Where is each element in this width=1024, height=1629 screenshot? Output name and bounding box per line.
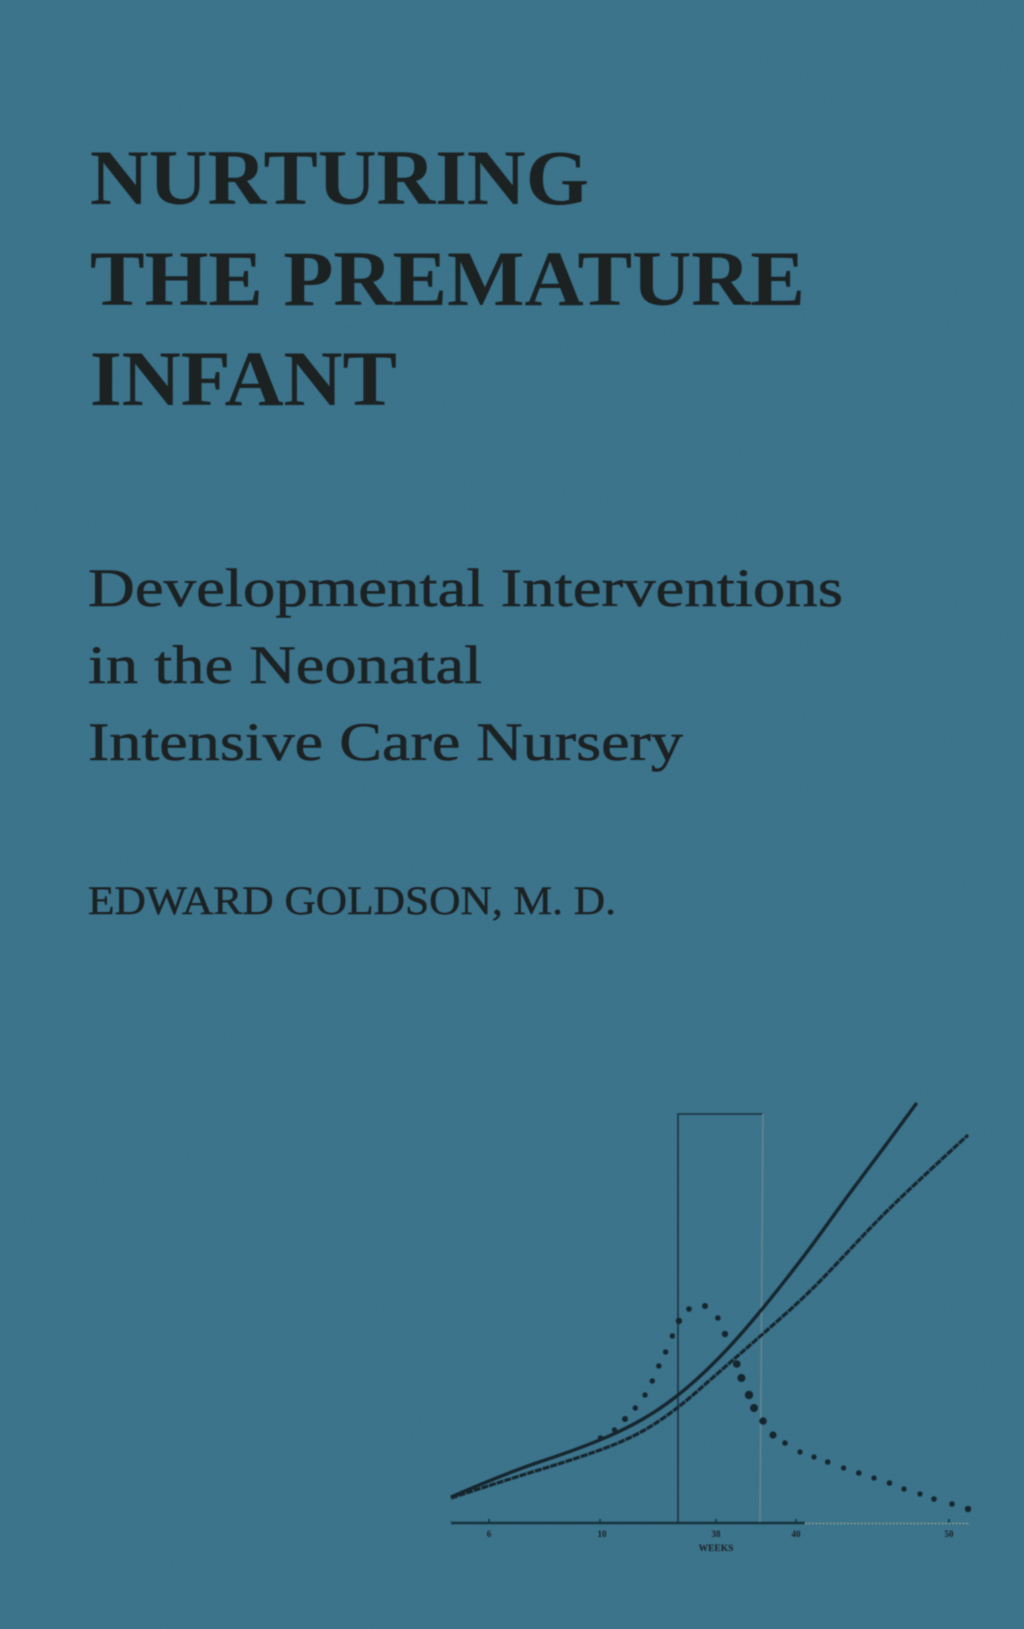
axis labels: WEEKS [699,1544,733,1554]
title [90,134,805,422]
growth chart [451,1103,971,1554]
axis labels: 40 [792,1529,801,1539]
author: EDWARD GOLDSON, M. D. [88,878,616,923]
subtitle: Developmental Interventions [88,558,843,618]
solid growth curve [451,1103,917,1497]
title: NURTURING [90,134,589,221]
dotted curve [598,1303,971,1512]
subtitle [88,558,843,772]
axis labels: 38 [712,1529,721,1539]
title: INFANT [90,335,397,422]
x axis [451,1519,970,1524]
dashed growth curve [451,1135,968,1498]
axis labels: 10 [598,1529,607,1539]
highlighted weeks rectangle [678,1114,763,1523]
subtitle: Intensive Care Nursery [88,712,683,772]
title: THE PREMATURE [90,235,805,322]
subtitle: in the Neonatal [88,635,482,695]
axis labels: 50 [944,1529,954,1539]
axis labels [487,1529,954,1554]
axis labels: 6 [487,1529,492,1539]
